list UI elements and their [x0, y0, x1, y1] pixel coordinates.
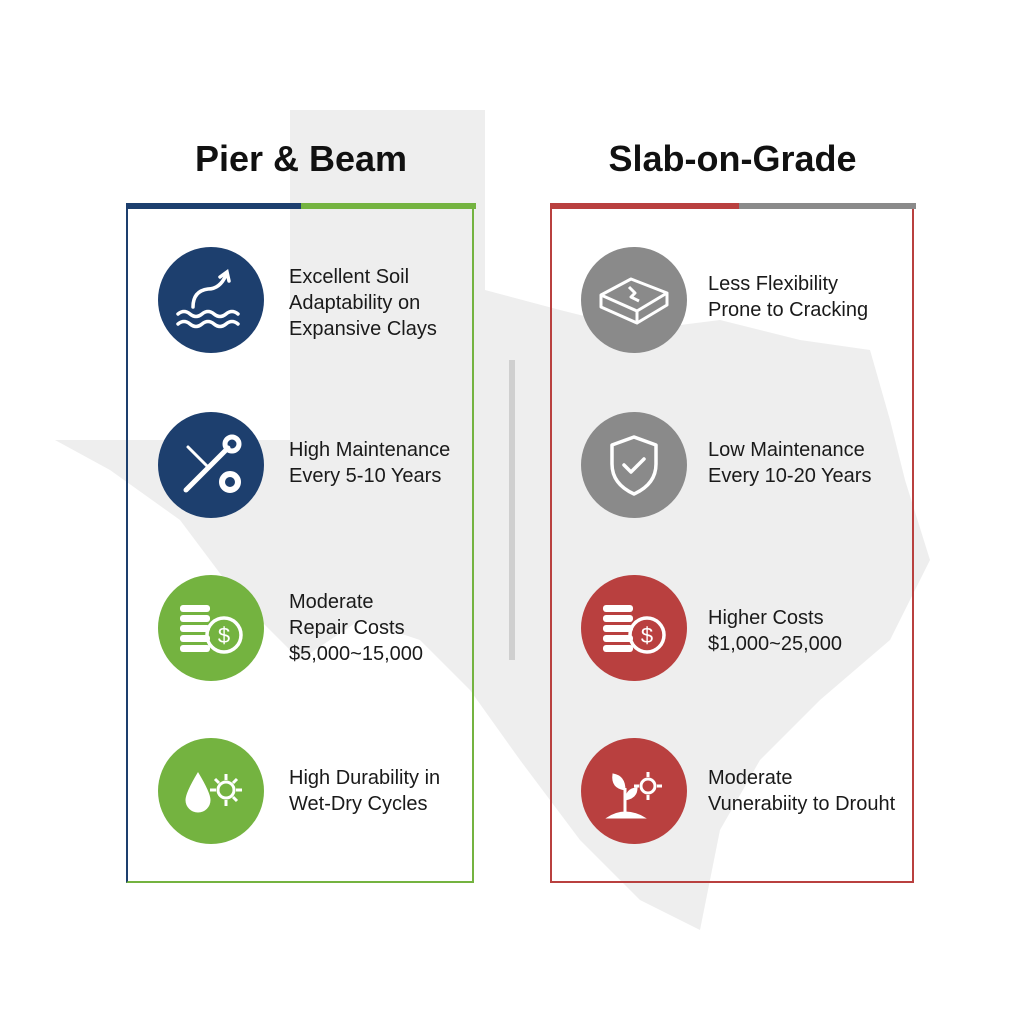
- icon: coins: [158, 575, 264, 681]
- text: soil: Expansive Clays: [289, 318, 437, 340]
- icon: shield: [581, 412, 687, 518]
- title: Slab-on-Grade: Slab-on-Grade: [608, 138, 857, 179]
- text: repair: $5,000~15,000: [289, 643, 423, 665]
- icon: plant sun: [581, 738, 687, 844]
- text: higher costs: [708, 607, 842, 655]
- text: drought: [708, 767, 896, 815]
- text: durability: High Durability in: [289, 767, 440, 789]
- text: durability: Wet-Dry Cycles: [289, 793, 428, 815]
- text: higher costs: $1,000~25,000: [708, 633, 842, 655]
- text: higher costs: Higher Costs: [708, 607, 824, 629]
- text: low maintenance: Low Maintenance: [708, 439, 865, 461]
- text: soil: Adaptability on: [289, 292, 420, 314]
- text: low maintenance: Every 10-20 Years: [708, 465, 871, 487]
- text: soil: Excellent Soil: [289, 266, 409, 288]
- text: soil: [289, 266, 437, 340]
- text: durability: [289, 767, 440, 815]
- text: maintenance: High Maintenance: [289, 439, 450, 461]
- icon: coins red: $: [641, 623, 653, 648]
- divider: [509, 360, 515, 660]
- text: low maintenance: [708, 439, 871, 487]
- text: repair: [289, 591, 423, 665]
- panel: pier & beam: [126, 203, 474, 883]
- text: maintenance: [289, 439, 450, 487]
- icon: soil waves: [158, 247, 264, 353]
- text: drought: Moderate: [708, 767, 792, 789]
- text: cracking: [708, 273, 868, 321]
- text: cracking: Less Flexibility: [708, 273, 838, 295]
- icon: tools: [158, 412, 264, 518]
- text: repair: Moderate: [289, 591, 374, 613]
- text: repair: Repair Costs: [289, 617, 405, 639]
- text: drought: Vunerabiity to Drouht: [708, 793, 895, 815]
- text: cracking: Prone to Cracking: [708, 299, 868, 321]
- text: maintenance: Every 5-10 Years: [289, 465, 441, 487]
- panel: slab-on-grade: [550, 203, 914, 883]
- title: Pier & Beam: Pier & Beam: [195, 138, 407, 179]
- icon: coins red: [581, 575, 687, 681]
- icon: coins: $: [218, 623, 230, 648]
- icon: drop sun: [158, 738, 264, 844]
- icon: cracked slab: [581, 247, 687, 353]
